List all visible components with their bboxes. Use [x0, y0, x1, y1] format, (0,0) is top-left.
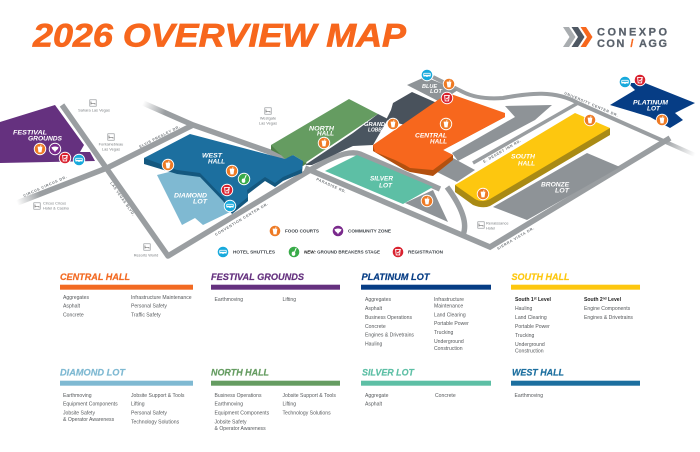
panel: Festival Grounds: GROUNDS	[28, 135, 63, 142]
panel: Platinum Lot: PLATINUM	[633, 99, 669, 106]
panel: Platinum Lot exhibits: Aggregates	[365, 297, 392, 303]
logo: CONEXPO CON/AGG: CON / AGG	[597, 38, 667, 50]
panel: South Hall exhibits: Engine Components	[584, 306, 631, 312]
panel: Central Hall: HALL	[430, 138, 447, 145]
panel: South Hall exhibits: South 2	[584, 297, 603, 303]
panel: South Hall exhibits	[511, 272, 640, 354]
hotels: Sahara Las Vegas	[78, 108, 110, 112]
panel: Bronze Lot	[493, 153, 620, 220]
hotels: Renaissance	[486, 220, 508, 226]
hotels: Fontainebleau	[99, 142, 123, 146]
hotels: Las Vegas	[259, 120, 277, 126]
panel: Diamond Lot exhibits: Personal Safety	[131, 410, 167, 416]
panel: Silver Lot exhibits: SILVER LOT	[362, 368, 415, 378]
gray plaza	[433, 158, 475, 182]
hotels: Hotel & Casino	[43, 206, 69, 210]
hotels: Resorts World	[134, 252, 158, 258]
panel: Platinum Lot exhibits: Portable Power	[434, 321, 469, 327]
legend: HOTEL SHUTTLES	[233, 250, 275, 255]
panel: Grand Lobby: LOBBY	[368, 128, 386, 134]
panel: Platinum Lot exhibits: PLATINUM LOT	[362, 272, 431, 282]
legend: FOOD COURTS	[285, 229, 319, 234]
road labels: PARADISE RD.	[316, 177, 346, 194]
panel: Diamond Lot exhibits: Jobsite Support & Tools	[131, 393, 185, 399]
panel: Festival Grounds	[0, 105, 95, 163]
panel: Platinum Lot: LOT	[647, 105, 661, 112]
legend	[217, 225, 444, 258]
panel: Platinum Lot exhibits: Land Clearing	[434, 312, 466, 318]
panel: Platinum Lot exhibits: Hauling	[365, 342, 382, 348]
panel: Central Hall	[373, 93, 505, 176]
panel: West Hall exhibits	[511, 368, 640, 399]
panel: Platinum Lot exhibits: Business Operations	[365, 315, 412, 321]
road labels: UNIVERSITY CENTER DR.	[564, 91, 619, 118]
panel: Blue Lot: BLUE	[422, 84, 438, 90]
panel: South Hall exhibits: South 1	[515, 297, 534, 303]
panel: Silver Lot exhibits: Asphalt	[365, 402, 383, 408]
panel: Platinum Lot	[610, 83, 695, 128]
panel: Silver Lot exhibits	[361, 368, 491, 408]
road labels: SIERRA VISTA DR.	[496, 226, 535, 251]
road labels: E. DESERT INN RD.	[482, 139, 522, 164]
panel: Silver Lot: LOT	[379, 182, 393, 189]
panel: Central Hall exhibits	[60, 272, 193, 318]
panel: Platinum Lot exhibits: Maintenance	[434, 304, 463, 310]
logo: CONEXPO CON/AGG	[563, 26, 667, 50]
panel: Platinum Lot exhibits: Underground	[434, 339, 464, 345]
panel: North Hall exhibits: Earthmoving	[214, 402, 243, 408]
panel: West Hall: HALL	[208, 158, 225, 165]
panel: North Hall exhibits	[211, 368, 340, 432]
map icons	[34, 69, 668, 212]
panel: Silver Lot	[325, 155, 433, 204]
panel: West Hall: WEST	[202, 152, 223, 159]
panel: West Hall exhibits: WEST HALL	[512, 368, 564, 378]
panel: North Hall exhibits: & Operator Awareness	[214, 426, 266, 432]
roads	[17, 77, 695, 256]
panel: South Hall exhibits: Underground	[515, 342, 545, 348]
panel: Silver Lot exhibits: Concrete	[435, 393, 456, 399]
panel: Platinum Lot exhibits: Asphalt	[365, 306, 383, 312]
road labels	[23, 91, 619, 251]
panel: North Hall exhibits: NORTH HALL	[211, 368, 269, 378]
panel: South Hall exhibits: Level	[537, 297, 552, 303]
panel: Platinum Lot exhibits: Infrastructure	[434, 297, 464, 303]
panel: Diamond Lot	[157, 170, 230, 225]
map	[0, 69, 695, 258]
road labels: ELVIS PRESLEY DR.	[139, 125, 181, 149]
panel: North Hall: NORTH	[309, 125, 335, 132]
panel: South Hall exhibits: SOUTH HALL	[512, 272, 570, 282]
road labels: CIRCUS CIRCUS DR.	[23, 175, 67, 198]
legend: NEW: GROUND BREAKERS STAGE	[304, 250, 380, 255]
panel: Diamond Lot exhibits: & Operator Awareness	[63, 417, 115, 423]
panel: North Hall exhibits: Business Operations	[214, 393, 262, 399]
panel: Platinum Lot exhibits	[361, 272, 491, 352]
panel: South Hall exhibits: Trucking	[515, 333, 535, 339]
panel: Central Hall exhibits: Infrastructure Maintenance	[131, 295, 192, 301]
panel: Diamond Lot: DIAMOND	[174, 192, 208, 199]
panel: Blue Lot	[407, 77, 458, 102]
panel: Platinum Lot exhibits: Engines & Drivetrains	[365, 332, 414, 338]
panel: Silver Lot: SILVER	[370, 175, 394, 182]
panel: South Hall exhibits: Hauling	[515, 306, 532, 312]
panel: Grand Lobby	[305, 92, 437, 165]
logo: CONEXPO CON/AGG: CONEXPO	[597, 26, 667, 38]
panel: South Hall exhibits: Level	[607, 297, 622, 303]
panel: North Hall exhibits: Lifting	[282, 402, 296, 408]
legend: COMMUNITY ZONE	[348, 229, 391, 234]
panel: Diamond Lot exhibits: Equipment Components	[63, 402, 118, 408]
panel: South Hall	[455, 113, 610, 207]
panel: Bronze Lot: LOT	[555, 187, 570, 194]
panel: West Hall	[144, 134, 303, 214]
panel: Silver Lot exhibits: Aggregate	[365, 393, 389, 399]
panel: South Hall exhibits: Portable Power	[515, 324, 550, 330]
road labels: CONVENTION CENTER DR.	[214, 202, 269, 237]
hotels: Hotel	[486, 226, 495, 230]
hotels: Westgate	[260, 116, 276, 120]
panel: North Hall exhibits: Technology Solutions	[282, 410, 331, 416]
panel: South Hall: HALL	[518, 160, 535, 167]
panel: South Hall exhibits: nd	[603, 296, 607, 300]
panel: Festival Grounds exhibits	[211, 272, 340, 303]
panel: Central Hall exhibits: CENTRAL HALL	[60, 272, 130, 282]
panel: Diamond Lot exhibits	[60, 368, 193, 426]
hotels: Circus Circus	[43, 200, 66, 206]
panel: Platinum Lot exhibits: Trucking	[434, 330, 454, 336]
hotels: Las Vegas	[102, 146, 120, 152]
panel: Central Hall exhibits: Personal Safety	[131, 304, 167, 310]
panel: Diamond Lot exhibits: Earthmoving	[63, 393, 92, 399]
panel: South Hall exhibits: Land Clearing	[515, 315, 547, 321]
legend: REGISTRATION	[408, 250, 444, 255]
panel: Bronze Lot: BRONZE	[541, 181, 570, 188]
panel: Festival Grounds: FESTIVAL	[13, 129, 47, 136]
panel: South Hall exhibits: st	[534, 296, 537, 300]
panel: Festival Grounds exhibits: Earthmoving	[214, 297, 243, 303]
panel: North Hall exhibits: Equipment Components	[214, 410, 270, 416]
title: 2026 OVERVIEW MAP	[32, 18, 407, 54]
road labels: LAS VEGAS BLVD.	[109, 181, 135, 216]
panel: Diamond Lot: LOT	[193, 198, 208, 205]
panel: North Hall: HALL	[317, 130, 334, 137]
panel: West Hall exhibits: Earthmoving	[514, 393, 543, 399]
panel: South Hall exhibits: Construction	[515, 348, 544, 354]
panel: Central Hall exhibits: Aggregates	[63, 295, 90, 301]
panel: Diamond Lot exhibits: Lifting	[131, 402, 145, 408]
panel: Grand Lobby: GRAND	[364, 122, 385, 128]
parking wedge	[452, 105, 552, 161]
panel: North Hall	[271, 99, 378, 166]
panel: Diamond Lot exhibits: DIAMOND LOT	[60, 368, 126, 378]
panel: Central Hall exhibits: Traffic Safety	[131, 312, 161, 318]
panel: North Hall exhibits: Jobsite Safety	[214, 420, 247, 426]
panel: Central Hall exhibits: Concrete	[63, 312, 84, 318]
panel: Platinum Lot exhibits: Concrete	[365, 324, 386, 330]
panel: Diamond Lot exhibits: Technology Solutions	[131, 420, 180, 426]
panel: South Hall exhibits: Engines & Drivetrains	[584, 315, 633, 321]
panel: Platinum Lot exhibits: Construction	[434, 346, 463, 352]
gray triangle lot	[405, 190, 448, 222]
panel: Festival Grounds exhibits: Lifting	[282, 297, 296, 303]
panel: Central Hall exhibits: Asphalt	[63, 304, 81, 310]
panel: Diamond Lot exhibits: Jobsite Safety	[63, 410, 95, 416]
hotels	[34, 100, 509, 258]
panel: North Hall exhibits: Jobsite Support & Tools	[282, 393, 336, 399]
panel: Central Hall: CENTRAL	[415, 132, 447, 139]
panel: Blue Lot: LOT	[430, 89, 443, 95]
panel: South Hall: SOUTH	[511, 153, 536, 160]
panel: Festival Grounds exhibits: FESTIVAL GROUNDS	[211, 272, 305, 282]
